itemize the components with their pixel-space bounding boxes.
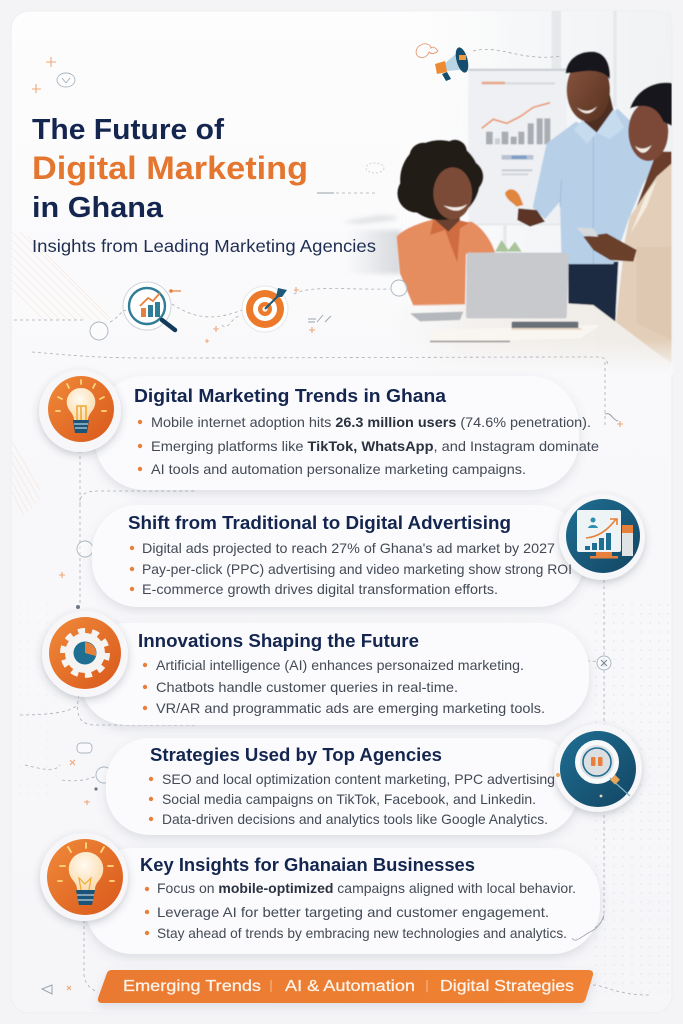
banner labels: Digital Strategies [440,978,574,995]
title: Digital Marketing [32,150,308,186]
title [32,114,308,224]
panel: shift to digital advertising [92,494,645,607]
title: The Future of [32,114,224,146]
seated woman with afro [397,140,495,306]
icon: magnifier with chart [123,282,175,330]
bullet list: Leverage AI for better targeting and customer engagement. [157,905,549,920]
fade to body below photo [372,340,673,374]
bullet list: Mobile internet adoption hits 26.3 million users (74.6% penetration). [151,415,591,430]
panel: digital marketing trends [39,370,599,490]
icon: light bulb [39,370,121,452]
icon: magnifying glass [554,724,642,812]
standing woman in beige blazer [576,83,673,363]
banner: key themes [98,970,593,1003]
bullet list: Digital ads projected to reach 27% of Ghana's ad market by 2027 [142,541,555,556]
heading: Key Insights for Ghanaian Businesses [140,854,475,875]
right edge of card [673,20,683,380]
icon: analytics monitor [559,494,645,580]
heading: Strategies Used by Top Agencies [150,744,442,765]
whiteboard with growth chart [468,69,567,223]
bullet list: Emerging platforms like TikTok, WhatsApp , and Instagram dominate [151,439,599,454]
heading: Digital Marketing Trends in Ghana [134,385,447,406]
bullet list: Data-driven decisions and analytics tools like Google Analytics. [162,812,548,827]
icon: glowing bulb [40,833,128,921]
section divider dashes [32,352,608,366]
icon: megaphone [435,46,471,81]
banner separators [271,980,427,992]
panel: innovations [42,611,589,725]
decorative plus signs and heart at top left [32,57,75,93]
window frames [477,10,617,253]
bullet list: AI tools and automation personalize marketing campaigns. [151,462,526,477]
accent nodes along connectors [42,414,623,994]
background texture [12,232,670,1000]
plant [495,240,522,252]
panel: key insights [40,833,604,954]
dashed arrow beside hero text [317,163,384,193]
table [413,302,666,362]
bullet list: Focus on mobile-optimized campaigns aligned with local behavior. [157,881,576,896]
connector nodes and dashes in hero [14,280,407,343]
curled connector on panel [572,915,604,940]
laptop [410,253,569,321]
icon: target with dart [242,286,288,332]
photo: marketing team around a laptop [380,10,673,373]
grey blurred chair left of the photo [342,215,401,274]
connector lines [20,362,650,995]
banner labels [123,978,574,995]
bullet list: Stay ahead of trends by embracing new technologies and analytics. [157,926,567,941]
banner labels: Emerging Trends [123,978,261,995]
bullet list: Artificial intelligence (AI) enhances personaized marketing. [156,658,524,673]
bullet list: Chatbots handle customer queries in real-time. [156,680,458,695]
papers and tablet on table [430,322,600,342]
icon: scribble balloons [416,44,438,58]
bullet list: Social media campaigns on TikTok, Facebook, and Linkedin. [162,792,536,807]
heading: Shift from Traditional to Digital Advertising [128,512,511,533]
panel: agency strategies [106,724,642,835]
bullet list [138,415,599,477]
standing man [505,52,658,325]
bullet list: VR/AR and programmatic ads are emerging marketing tools. [156,701,545,716]
title: in Ghana [32,192,164,224]
bullet list: E-commerce growth drives digital transformation efforts. [142,582,498,597]
bullet list: Pay-per-click (PPC) advertising and video marketing show strong ROI [142,562,572,577]
dashed line near megaphone [473,49,562,57]
bullet list [149,772,555,827]
subtitle: Insights from Leading Marketing Agencies [32,236,376,256]
bullet list: SEO and local optimization content marketing, PPC advertising [162,772,555,787]
bullet list [145,881,576,941]
window backdrop [380,10,673,312]
icon: gear [42,611,128,697]
bullet list [130,541,572,597]
heading: Innovations Shaping the Future [138,630,419,651]
bullet list [143,658,545,716]
banner labels: AI & Automation [285,978,415,995]
